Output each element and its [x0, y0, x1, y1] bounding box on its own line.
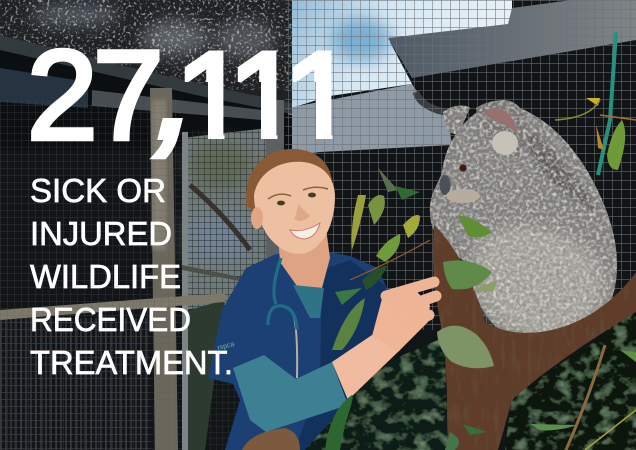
- eyes: [277, 193, 316, 205]
- headline number: 1: [282, 24, 359, 178]
- caption: TREATMENT.: [30, 344, 233, 381]
- foliage front left: [305, 340, 448, 450]
- koala fur: [430, 100, 617, 340]
- sky: [285, 0, 512, 110]
- leaves near face: [376, 234, 400, 262]
- left foliage top: [0, 0, 292, 105]
- sky blue patch: [332, 18, 392, 62]
- scrubs: [208, 252, 392, 450]
- foliage speckle: [0, 0, 292, 90]
- neck: [278, 228, 330, 296]
- smile: [290, 223, 320, 239]
- trunk and branch: [433, 225, 636, 450]
- pillar highlight: [152, 100, 166, 250]
- forearm: [332, 335, 400, 400]
- teal drain pipe: [598, 32, 616, 175]
- distant tree branch: [190, 185, 250, 250]
- teal sleeve: [233, 355, 348, 432]
- dark upper left band: [0, 48, 292, 150]
- koala: [430, 100, 617, 340]
- lower large leaf: [437, 326, 494, 368]
- second beam: [92, 90, 262, 120]
- hair: [246, 149, 332, 212]
- foliage highlights: [30, 3, 275, 60]
- top beam: [0, 35, 292, 114]
- inner ear: [484, 108, 518, 135]
- log: [242, 428, 300, 450]
- rail: [182, 265, 245, 282]
- arm and hand: [332, 282, 436, 400]
- nose: [440, 175, 450, 195]
- foliage bottom right: [505, 305, 636, 450]
- upper building roof: [388, 0, 636, 78]
- main leaf on branch: [443, 260, 492, 289]
- ear tuft: [492, 131, 518, 155]
- headline number: 2: [27, 24, 98, 166]
- eyebrows: [268, 187, 328, 199]
- scrub logo: rspca: [217, 341, 235, 352]
- gutter pipe: [416, 92, 444, 112]
- diagonal rail behind: [0, 293, 225, 320]
- distant garden: [182, 128, 268, 310]
- left mesh overlay: [0, 100, 182, 450]
- fingers: [386, 282, 436, 325]
- caption: WILDLIFE: [30, 258, 181, 295]
- caption: RECEIVED: [30, 301, 191, 338]
- blue band: [0, 68, 88, 108]
- headline number: 1: [227, 24, 304, 178]
- muzzle: [446, 189, 480, 203]
- woman vet: [208, 149, 392, 450]
- eucalyptus leaves: [325, 98, 636, 450]
- dark lower-left mesh: [0, 318, 150, 450]
- stethoscope: [268, 258, 297, 378]
- face: [254, 162, 335, 254]
- headline number: 7: [93, 24, 164, 166]
- small leaf at koala: [472, 280, 498, 292]
- right mesh overlay: [285, 0, 636, 330]
- lower building: [288, 84, 452, 156]
- post: [266, 100, 284, 260]
- ear: [251, 207, 263, 229]
- nose: [294, 204, 310, 221]
- garden mesh: [182, 130, 268, 450]
- pillar: [150, 88, 178, 450]
- top right leaves: [586, 98, 600, 106]
- headline number: ,: [139, 2, 222, 169]
- palm: [372, 285, 430, 352]
- headline number: [31, 48, 332, 160]
- undershirt: [293, 285, 324, 318]
- stems: [566, 345, 605, 450]
- eye: [459, 164, 467, 172]
- caption: INJURED: [30, 215, 172, 252]
- caption: [30, 172, 233, 381]
- caption: SICK OR: [30, 172, 166, 209]
- headline number: 1: [174, 24, 251, 178]
- dark scrubs shade: [295, 260, 388, 450]
- lower garden: [182, 300, 225, 450]
